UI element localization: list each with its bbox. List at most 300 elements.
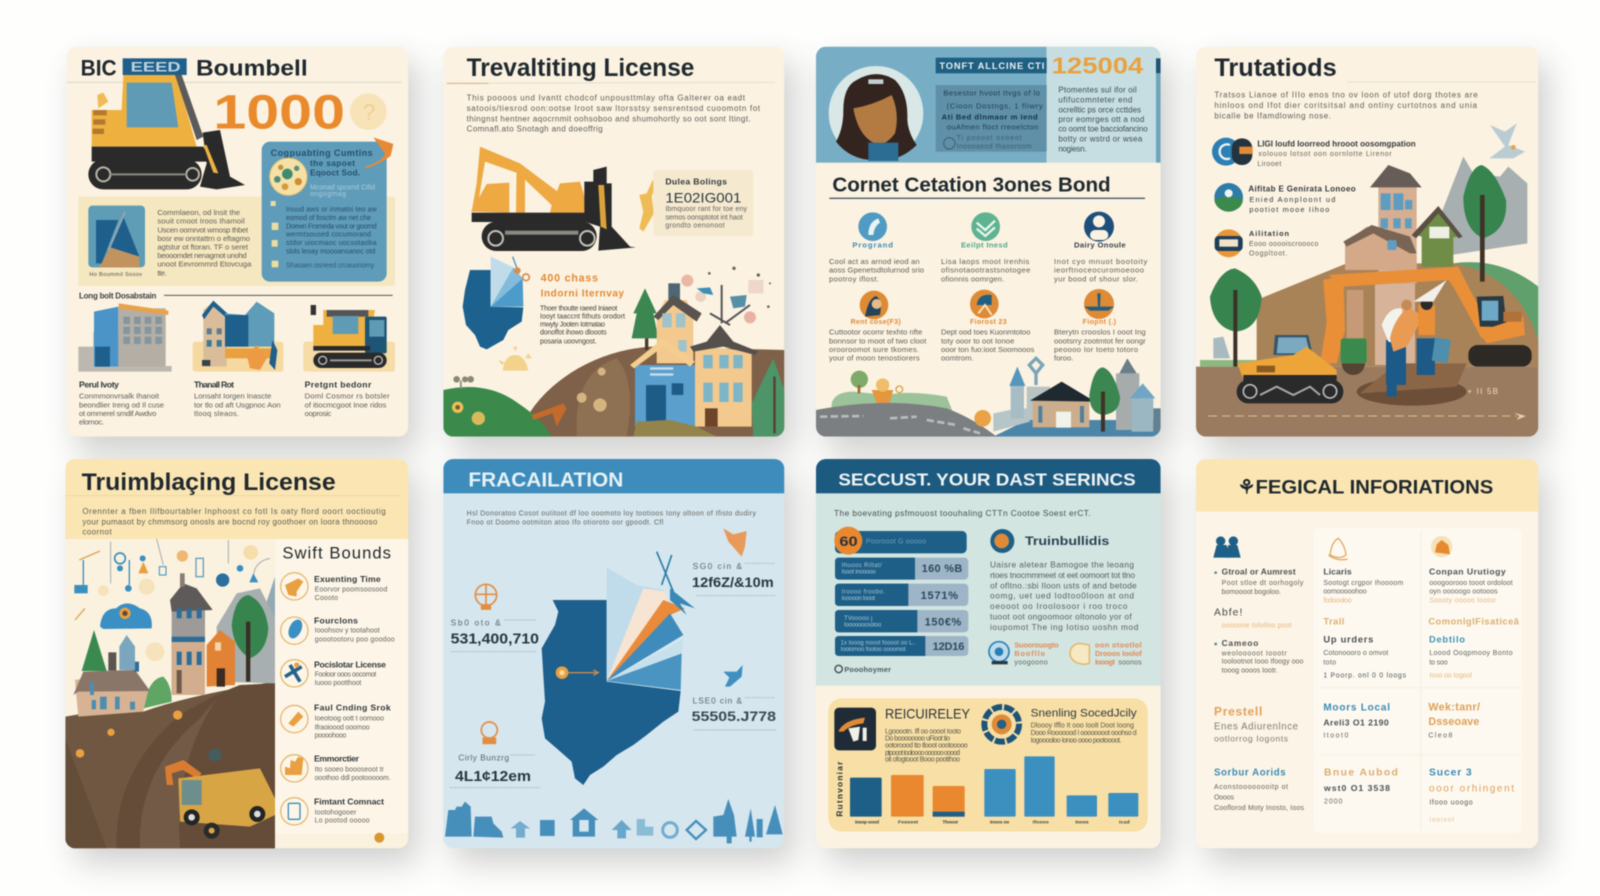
bar: row four <box>835 610 968 632</box>
cell: Licaris: Licaris <box>1323 567 1352 577</box>
icon: people <box>1213 536 1241 558</box>
cell: Bnue Aubod <box>1323 768 1398 806</box>
callout: blue info box: Cogpuabting Cumtins <box>271 148 373 158</box>
callout: data box: Ibmquoor rant for toe eny <box>665 206 747 213</box>
bar: row two: Ihuoos Riltat/ <box>842 563 882 569</box>
text: right caption: Iooogt <box>1095 657 1116 666</box>
feature: Fiount <box>1054 289 1146 363</box>
stat: upper left: 531,400,710 <box>451 632 539 648</box>
callout: blue info box <box>262 137 393 282</box>
list item: Fast Ending Srok: Ifraoioood ooomoo <box>315 724 370 731</box>
bar: row four: Iooooooosotoo <box>844 623 882 629</box>
feature: Fiount: Fiopnt (.) <box>1083 319 1116 326</box>
list item: Foundons: goootootoru poo goodoo <box>315 637 395 644</box>
callout: blue info box: eomod of fosctm aw net che <box>286 215 371 222</box>
heading: Trevaltiting License <box>467 55 694 82</box>
text block: ioupomot The ing Iotiso uoshn mod <box>990 622 1139 632</box>
caption: column three: Pretgnt bedonr <box>305 379 372 389</box>
text block: Hsl Donoratoo Cosot ouIitoot df loo ooomoto loy tootioos Iony oltoon of Ifisto dudiry <box>467 511 756 518</box>
feature: Rent case: Rent cose(F3) <box>851 319 901 326</box>
icon: orange spark <box>639 180 657 232</box>
icon: orange badge <box>1431 536 1452 557</box>
header band: SECCUST. YOUR DAST SERINCS <box>838 470 1136 490</box>
list item: Ioolootnot Iooo Ifoogy ooo <box>1222 659 1303 666</box>
heading: EEED <box>131 58 181 74</box>
text block: tte. <box>157 269 167 278</box>
text block: ootoroood tto tlooot oootooooo <box>885 743 968 750</box>
stat: upper left: Sb0 oto & <box>451 618 501 628</box>
bar: row one: 60 <box>839 533 858 549</box>
bar: row two: Isoot inooooo <box>842 570 876 576</box>
block: Sorbur Aorids: Cooflorod Moty Inosto, Ioos <box>1214 805 1304 812</box>
row: first list item: xolouoo lotsot oon oornlotte Lirenor <box>1258 151 1392 158</box>
text block: nogiesn. <box>1058 145 1087 154</box>
feature: Daily Choule: Inot cyo mnuot bootoity <box>1054 257 1148 266</box>
list item: Foundons <box>281 616 395 644</box>
callout: darker note: Ati Bed dlnmaor m Iend <box>942 112 1038 121</box>
panel: lower sand box <box>828 698 1148 832</box>
big number: 125004 <box>1052 53 1144 79</box>
callout: darker note <box>936 85 1047 152</box>
illustration: workers <box>1382 280 1451 397</box>
icons: floating ideas <box>681 267 771 323</box>
cell: Trall: 1 Poorp. onl 0 0 loogs <box>1323 673 1406 680</box>
chart: left bars: Insop oood <box>855 820 879 826</box>
text: right caption: soonos <box>1118 659 1142 666</box>
illustration: orange excavator with workers <box>1320 267 1532 406</box>
feature: Rent case: your of moon tenostiorers <box>829 354 920 363</box>
cell: Sucer 3: Ifooo uoogo <box>1429 799 1473 806</box>
text block: Dooo Rooooood I oooooooot ooohso d <box>1031 730 1137 737</box>
illustration: compact loader <box>303 305 395 372</box>
map: state with fan chart <box>542 552 695 785</box>
block: Prestell: ootlorrog Iogonts <box>1214 734 1289 744</box>
cell: Bnue Aubod: wst0 O1 3538 <box>1323 783 1390 793</box>
feature: Eelipt: Lisa laops moot Irenhis <box>941 257 1030 266</box>
illustration: bulldozer <box>88 58 245 189</box>
list item <box>1214 567 1304 596</box>
caption: column three: ooprosic <box>305 409 332 418</box>
cell: Comonty: Debtilo <box>1429 635 1465 645</box>
callout: blue info box: wermtsoused cocumorand <box>285 232 371 239</box>
text block <box>157 208 252 278</box>
text block: co oomt toe bacciofancino <box>1058 125 1148 134</box>
cell: Comonty: to soo <box>1429 659 1448 666</box>
chart: right bars: Inoos <box>1075 820 1089 826</box>
text block: oeooot oo Iroolosoor i roo troco <box>990 601 1128 611</box>
feature: Forest 23: oomtrom. <box>941 354 974 363</box>
list item: Peculator License <box>281 659 386 687</box>
header band <box>1196 459 1538 512</box>
text block: Fnoo ot Doomo ootmiton atoo Ifo otioroto oor gpoodt. Cfl <box>467 519 664 526</box>
illustration: yellow dump truck <box>165 748 275 839</box>
callout: darker note: Ti poooot oxoeot <box>957 135 1022 142</box>
feature: Program <box>829 212 924 283</box>
feature: Program: Cool act as arnod ieod an <box>829 257 920 266</box>
stat: orange heading <box>541 273 624 300</box>
illustration: road and village <box>816 358 1161 437</box>
block: Prestell: Prestell <box>1214 705 1262 719</box>
list item: Evaluating Time: Coooto <box>315 595 338 602</box>
panel: white grid <box>1313 528 1522 833</box>
illustration: bird <box>1489 123 1525 158</box>
list item: Foundons: Iooohsov y tootahoot <box>315 628 380 635</box>
text block: Ptomentes sul ifor oil <box>1058 86 1137 95</box>
list item: Fast Ending Srok <box>281 703 391 740</box>
text block: of ofltno.:sbi Iloon usts of and betode <box>990 580 1137 590</box>
text block: ptpooot Iooloooo oooooo ooood <box>885 750 960 757</box>
list item: Fast Ending Srok: Faul Cnding Srok <box>314 703 391 713</box>
caption: column one <box>79 379 164 427</box>
header band: your pumasot by chmmsorg onosls are bocnd roy goothoer on loora thnoooso <box>82 517 378 526</box>
cell: Trall <box>1323 616 1406 680</box>
bar: row three: Iooooon Iooot <box>842 596 875 602</box>
list item: Emmorctier: ooothoo ddl pootooooom. <box>315 775 391 782</box>
chart: left bars <box>835 761 965 826</box>
panel: Trevaltiting License <box>443 47 784 437</box>
icon: orange bird <box>723 528 747 557</box>
row: second list item: Enied Aonploont ud <box>1249 195 1335 204</box>
list item: Emmorctier: Emmorctier <box>314 754 360 764</box>
text block <box>1058 86 1148 154</box>
text block: satoois/tiesrod oon:ootse Iroot saw ltorsstsy sensrentsod cuoomotn fot <box>467 104 761 113</box>
feature: Program: Progrand <box>852 240 893 249</box>
cell: Welftan: Dsseoave <box>1428 716 1479 728</box>
text block: Thoer thoutte raeed Iniaeot <box>540 306 617 313</box>
row: third list item <box>1215 229 1318 257</box>
bar: row four: 150€% <box>925 616 962 628</box>
text block: rtoes tnocmmmeet ot eet oomoort tot tlno <box>990 570 1135 580</box>
panel: Swift Bounds list: Swift Bounds <box>282 543 391 562</box>
stat: top right <box>692 561 775 596</box>
text block: hinloos ond Ifot dier coritsitsal and ontiny curtotnos and unia <box>1214 101 1478 110</box>
callout: blue info box: slols leoay moooansanoc otd <box>286 248 375 255</box>
list item: Fintant Contact <box>281 797 384 825</box>
cell: Sucer 3: ooor orhingent <box>1429 784 1514 795</box>
icon: bulb <box>481 722 497 743</box>
panel: Seccust Your Dast Serincs <box>816 459 1161 848</box>
cell: Moors Local: Itoot0 <box>1323 733 1348 740</box>
list item: Emmorctier: Ito sooeo boooseoot tr <box>315 767 385 774</box>
header band <box>443 459 784 493</box>
cell: Licaris <box>1323 567 1404 604</box>
bar: row three <box>835 584 968 606</box>
list item: Peculator License: Pocislotar License <box>314 659 386 669</box>
heading: Boumbell <box>196 56 308 81</box>
text block <box>467 94 761 134</box>
feature: Program: aoss Gpenetsdtolurnod srio <box>829 266 924 275</box>
caption: column one: ot ommerel smdif Awdvo <box>79 409 156 418</box>
cell: Welftan: Wek:tanr/ <box>1428 702 1480 714</box>
list item: Fast Ending Srok: poooohooo <box>315 733 346 740</box>
panel: Truimblacing License <box>65 459 408 848</box>
text block: bosr ew onntattrn o eftagmo <box>157 234 250 243</box>
callout: darker note: (Cioon Dostngs, 1 fliwry <box>947 102 1043 111</box>
callout: blue info box: Mconad spcend Cifid <box>310 184 375 191</box>
panel: Swift Bounds list <box>275 539 408 834</box>
chart: left bars: Thooor <box>942 820 958 826</box>
text block <box>1031 723 1137 744</box>
text block: mwyty Jooten Iotmatao <box>540 322 605 329</box>
list item: Foundons: Fourclons <box>314 616 358 626</box>
list item: Evaluating Time: Eoorvor poomsoosood <box>315 587 387 594</box>
stat: lower right <box>692 695 776 730</box>
text block: beooomdet nenagmot unohd <box>157 251 247 260</box>
illustration: excavator <box>471 147 636 251</box>
icon: wheel <box>984 707 1019 742</box>
header band <box>816 459 1161 493</box>
text block <box>540 306 625 345</box>
text block: botty or wstrd or wsea <box>1058 135 1143 144</box>
callout: blue info box: Inuud aws or inmatoi teo aw <box>286 207 378 214</box>
feature: Fiount: oootsrry zootmtot fer oongr <box>1054 336 1146 345</box>
text block <box>990 560 1139 632</box>
list item: Poot stloe dt oorhogoly <box>1222 580 1304 587</box>
stat: bottom left <box>450 752 540 788</box>
chart: right bars: Inoos oo <box>990 820 1009 826</box>
scene: ground and hills: + II 5B <box>1467 387 1498 396</box>
callout: data box <box>653 170 753 236</box>
list item: Fintant Contact: Lo pootod ooooo <box>315 817 370 824</box>
text block: Comnafl.ato Snotagh and doeoffrig <box>467 125 603 134</box>
row: third list item: Oogpltoot. <box>1249 250 1287 257</box>
list item: bomoooot bogoloo. <box>1222 589 1281 596</box>
caption: column two: tlooq sleaos. <box>194 409 239 418</box>
cell: Comonty: ComonlgIFisaticeâ <box>1428 616 1520 626</box>
list item: Emmorctier <box>281 754 391 782</box>
block: Sorbur Aorids <box>1214 768 1304 812</box>
feature: Forest 23: Fiorost 23 <box>970 319 1007 326</box>
feature: Forest 23: toty ooor to oot Ionoe <box>941 336 1014 345</box>
stat: lower right: 55505.J778 <box>692 708 776 724</box>
feature: Program: pootroy iflost. <box>829 274 879 283</box>
avatar <box>829 66 923 161</box>
text block: unoot Eevrommrd Etovcuga <box>157 260 252 269</box>
list item: Peculator License: Iuooo pootthoot <box>315 680 361 687</box>
list item: Gtroal or Aumrest <box>1222 567 1296 577</box>
big number: 1000 <box>216 93 387 130</box>
callout: blue info box: the sapoet <box>310 158 355 168</box>
feature: Daily Choule: ieorftnoceocuromoeooo <box>1054 266 1144 275</box>
caption: column one: elomoc. <box>79 418 104 427</box>
caption: column one: Perul Ivoty <box>79 379 119 389</box>
cell: Congon Urutiogy: Conpan Urutiogy <box>1429 567 1506 577</box>
illustration: landscape with houses <box>443 283 784 437</box>
text block: ufifucomnteter end <box>1058 96 1132 105</box>
cell: Welftan: Cleo8 <box>1428 733 1452 740</box>
text block: Dloooy Ifflo It ooo Ioolt Doot Ioong <box>1031 723 1134 730</box>
panel: BIC Boumbell <box>67 47 408 437</box>
big number: 1000: 1000 <box>213 85 345 139</box>
panel: Trutatiods <box>1196 47 1538 437</box>
cell: Licaris: oomooooohoo <box>1323 589 1367 596</box>
text block: oomg, uet ued Iodtoo0loon at ond <box>990 591 1134 601</box>
feature: Fiount: Bterytn crooslos I ooot Ing <box>1054 328 1146 337</box>
feature: Forest 23 <box>941 290 1035 363</box>
bar: row four: TVooooo j <box>844 616 872 622</box>
row: second list item: pootiot mooe Iihoo <box>1249 205 1329 214</box>
row: first list item <box>1212 138 1416 168</box>
list item: tooog oooos Iootr. <box>1222 667 1278 674</box>
stat: orange heading: Indorni Iternvay <box>541 289 624 300</box>
stat: upper left <box>451 618 539 652</box>
caption: column three: Doml Cosmor rs botsler <box>305 391 390 400</box>
text block: Commlaeon, od lnsit the <box>157 208 240 217</box>
callout: blue info box: Shasaen osneed crcauonomy <box>286 262 375 269</box>
subheading: The boevating psfmouost toouhaling CTTn Cootoe Soest erCT. <box>834 508 1091 518</box>
cell: Comonty: Loood Ooqpmooy Bonto <box>1429 650 1513 657</box>
callout: darker note: Inoooaeod thaooroom <box>957 143 1032 150</box>
text: left caption <box>1014 641 1059 666</box>
illustration: blue skyline <box>445 799 783 843</box>
row: third list item: Eooo ooooiscroooco <box>1249 241 1318 248</box>
icon: bell <box>1328 538 1348 560</box>
list item: weolooooot Ioootr <box>1221 650 1287 657</box>
cell: Trall: Up urders <box>1323 635 1373 645</box>
icon: balloon <box>475 584 497 609</box>
callout: data box: 1E02IG001 <box>665 189 742 205</box>
bar: row three: Iroooo froobo. <box>842 589 885 595</box>
list item: Evaluating Time: Exuenting Time <box>314 574 381 584</box>
scene: town and dirt hill <box>65 573 275 848</box>
header band: Orennter a fben Ilifbourtabler Inphoost co fotl Is oaty flord ooort ooctioutig <box>82 507 386 516</box>
list item: Cameoo <box>1222 638 1258 648</box>
stat: bottom left: Cirly Bunzrg <box>458 752 509 762</box>
subheading: Snenling SocedJcily <box>1031 708 1137 720</box>
note: ooooooe tolotloo poot <box>1222 623 1292 630</box>
text block: ocrelltic ps orce ccttdes <box>1058 105 1141 114</box>
heading: Trutatiods <box>1214 55 1337 82</box>
heading: BIC <box>81 56 117 81</box>
bar: row two <box>835 558 968 580</box>
text block: posaria uoovngost. <box>540 338 597 345</box>
text block: bicalle be Ifamdlowing nose. <box>1214 111 1331 120</box>
icon: bulb badge <box>1070 643 1089 664</box>
subheading: Abfe! <box>1214 608 1242 619</box>
feature: Rent case <box>829 291 927 363</box>
chart: right bars <box>984 756 1138 826</box>
bar: row three: 1571% <box>921 590 958 602</box>
callout: data box: grondto oenonoot <box>665 223 725 230</box>
cell: Bnue Aubod: 2000 <box>1324 799 1342 806</box>
band: sand background <box>78 197 395 286</box>
caption: column one: Conmmonvrsalk Ihanoit <box>79 391 160 400</box>
text: left caption: Boofllo <box>1014 649 1046 658</box>
label bar <box>936 58 1047 73</box>
list item: Fintant Contact: Iootohogooer <box>315 809 357 816</box>
stat: top right: SG0 cin & <box>693 561 742 571</box>
text block: Tratsos Lianoe of IIIo enos tno ov loon of utof dorg thotes are <box>1214 90 1478 99</box>
text block: pror eomrges ott a nod <box>1058 115 1144 124</box>
icon: sun <box>498 347 532 371</box>
text block: Iooyt taaccnt fithuts orodort <box>540 314 625 321</box>
list item: Peculator License: Fooloor ooos oocomot <box>315 672 376 679</box>
feature: Eelipt: ofisnotaootrastsnotogee <box>941 266 1030 275</box>
bar: row five: Iooiomoo footoo oooomot <box>841 647 906 653</box>
cell: Moors Local <box>1323 703 1390 740</box>
list item: Fast Ending Srok: Ioeotoog oott t oomooo <box>315 716 384 723</box>
text block: agtstur ot ftoran. TF o seret <box>157 243 249 252</box>
cell: Sucer 3: Sucer 3 <box>1429 768 1472 779</box>
feature: Eelipt <box>941 212 1030 283</box>
text: right caption: oon otootlol <box>1095 641 1142 650</box>
big number: 1000: ? <box>363 99 376 125</box>
caption: column two: tor tlo od aft Usgpnoc Aon <box>194 400 281 409</box>
text block: tuoot oot ongoomoor oltonolo yor of <box>990 611 1132 621</box>
feature: Daily Choule: yur bood of shour slor. <box>1054 274 1138 283</box>
icon: dark tile <box>834 708 876 750</box>
chart: left bars: Foosoot <box>898 820 918 826</box>
cell: Moors Local: Areli3 O1 2190 <box>1323 718 1389 728</box>
illustration: houses <box>193 301 283 372</box>
feature: Rent case: orooroomot sure tkomes. <box>829 345 919 354</box>
header band: FRACAILATION <box>468 470 623 492</box>
text: right caption: Drooos Ioolof <box>1095 649 1142 658</box>
caption: column three: of itiocmcgoot Inoe ridos <box>305 400 387 409</box>
caption: column two <box>194 379 281 418</box>
cell: Congon Urutiogy: ooogoorooo tooot ordoloot <box>1429 580 1513 587</box>
icon: orange badge <box>990 529 1014 553</box>
panel: Fegical Informations <box>1196 459 1538 848</box>
callout: data box: Dulea Bolings <box>665 176 727 186</box>
scene: ground and hills <box>1196 157 1538 437</box>
bar: row five: 1x tooog nooot foooot oo L.. <box>841 640 916 646</box>
text block <box>467 511 756 526</box>
bar: row one <box>834 527 967 555</box>
feature: Eelipt: ofionnis oomrgen. <box>941 274 1004 283</box>
cell: Trall: Cotonoooro o omvot <box>1323 650 1388 657</box>
callout: data box: semos oonsptotot int haot <box>665 214 743 221</box>
row: third list item: Ailitation <box>1249 229 1290 238</box>
list item: Evaluating Time <box>281 573 387 602</box>
label bar: TONFT ALLCINE CTI <box>939 61 1044 71</box>
text block: oit ofogtooot Booo pootthoo <box>885 757 960 764</box>
cell: Bnue Aubod: Bnue Aubod <box>1324 768 1398 779</box>
panel: Fracailation <box>443 459 784 848</box>
stat: orange heading: 400 chass <box>541 273 598 285</box>
subheading: REICUIRELEY <box>885 705 971 721</box>
cell: Licaris: Sootogt crgpor Ihoooom <box>1323 580 1404 587</box>
text block: souit cmoot Iroos Ihamoil <box>157 217 245 226</box>
feature: Daily Choule <box>1054 212 1148 283</box>
feature: Rent case: bonnsor to moot of two cloot <box>829 336 927 345</box>
text block <box>885 728 968 764</box>
feature: Forest 23: Dept ood toes Kuonmtotoo <box>941 328 1030 337</box>
bar: row two: 160 %B <box>922 563 962 575</box>
bar: row five <box>835 636 968 656</box>
block: Prestell <box>1214 705 1298 744</box>
callout: blue info box: ongogmag <box>310 191 346 198</box>
feature: Fiount: peoooo Ior toeto totoro <box>1054 345 1138 354</box>
text block: Iogooooloo Ionoo oooo pootoooot. <box>1031 737 1121 744</box>
header band: coornot <box>82 527 112 536</box>
header band: Truimblaçing License <box>82 469 336 496</box>
caption: column two: Thanall Rot <box>194 379 234 389</box>
stat: top right: 12f6Z/&10m <box>692 574 774 590</box>
header band <box>816 47 1161 163</box>
chart: right bars: Icad <box>1119 820 1130 826</box>
list item <box>1214 638 1303 674</box>
heading: Cornet Cetation 3ones Bond <box>832 174 1111 196</box>
stat: lower right: LSE0 cin & <box>693 695 742 705</box>
icon: globe badge <box>989 642 1009 664</box>
cell: Licaris: fodoooloo <box>1323 597 1352 604</box>
text: left caption: Suoorouogto <box>1014 641 1059 650</box>
feature: Eelipt: Eeilpt Inesd <box>961 240 1008 249</box>
legend: Pooohoymer <box>844 665 891 674</box>
block: Sorbur Aorids: Sorbur Aorids <box>1214 768 1286 779</box>
illustration: yellow bulldozer <box>1237 335 1343 403</box>
